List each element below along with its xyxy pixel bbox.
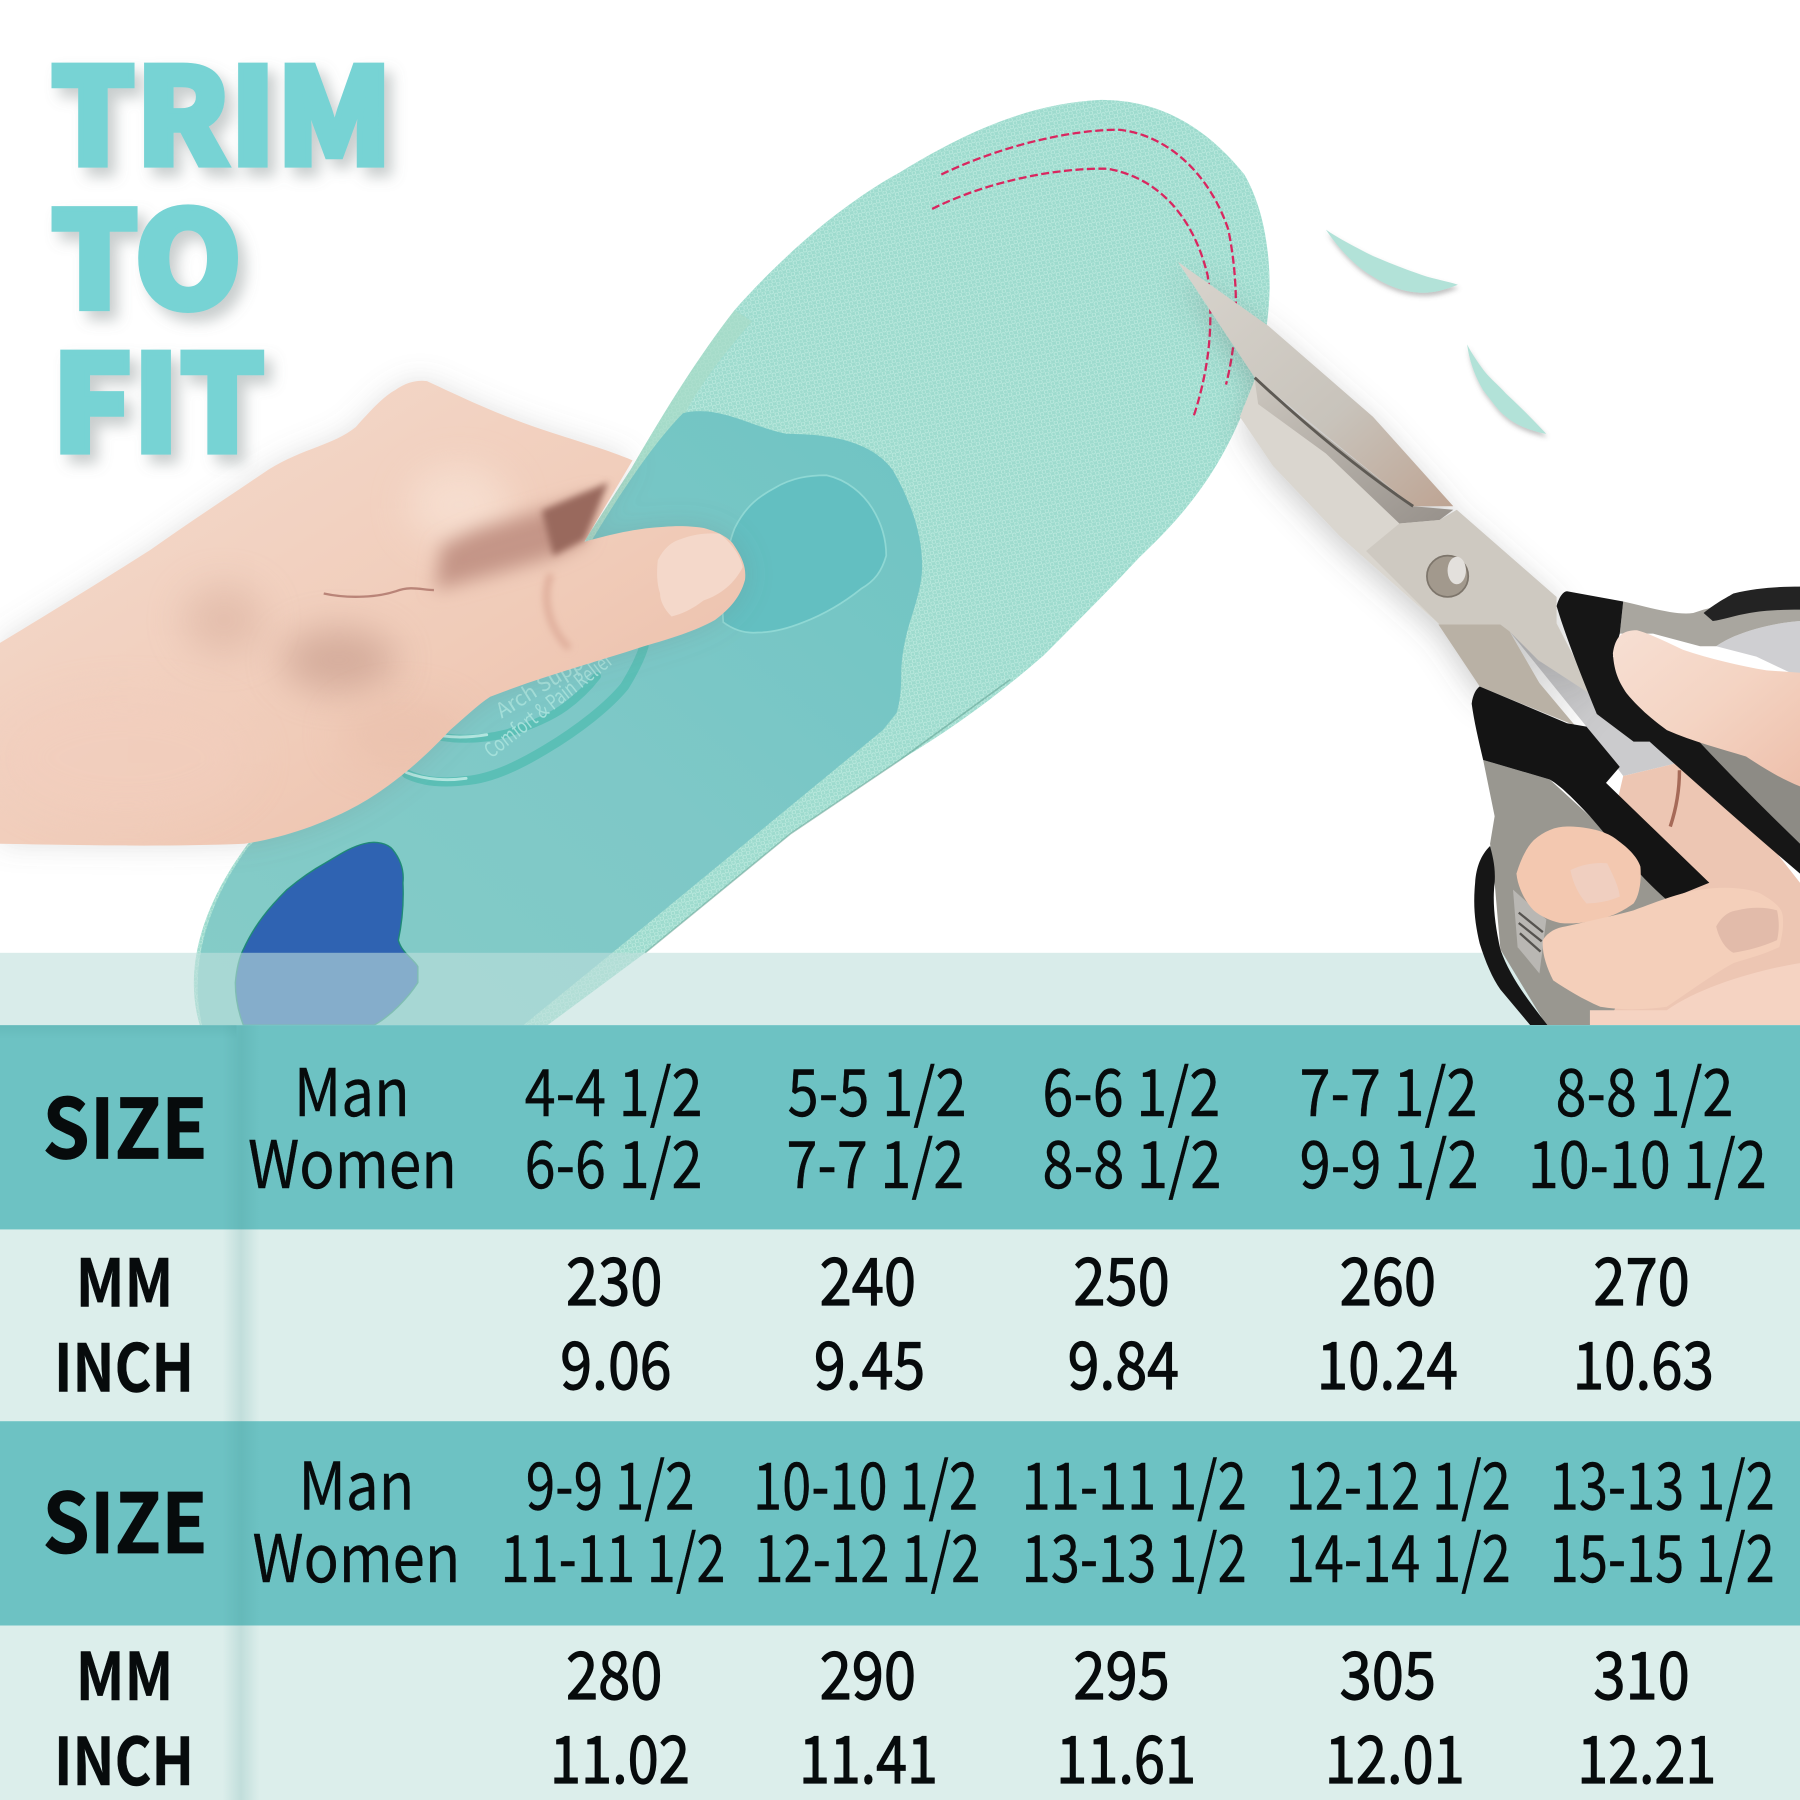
thumbnail	[657, 533, 743, 616]
row 1 size: 6-6 1/2	[1042, 1040, 1220, 1135]
trimmed scrap 2	[1467, 344, 1546, 434]
row 1 measurements: 270	[1593, 1229, 1690, 1324]
row backgrounds	[0, 1025, 1800, 1800]
title: trim to fit	[51, 12, 393, 491]
row 2 measurements: 11.61	[1056, 1707, 1196, 1800]
row 2 measurements: 11.02	[550, 1707, 690, 1800]
rim outer edge	[645, 680, 1010, 953]
trimmed scrap 1	[1326, 230, 1458, 293]
steel under thumb	[1513, 890, 1546, 973]
row 1 size: Women	[248, 1112, 457, 1207]
row 1 measurements: 10.24	[1317, 1313, 1458, 1408]
row 2 measurements: 310	[1593, 1623, 1690, 1718]
upper handle grey strip	[1700, 742, 1800, 844]
arch embossed rings	[406, 646, 644, 782]
title: trim to fit: TRIM	[51, 12, 393, 204]
row 1 size: 6-6 1/2	[525, 1112, 703, 1207]
palm crease	[1670, 770, 1679, 827]
row 2 measurements: 305	[1340, 1623, 1436, 1718]
lower blade bevel	[1255, 380, 1453, 523]
row 1 size: 7-7 1/2	[1299, 1040, 1477, 1135]
row 2 measurements: 12.01	[1325, 1707, 1465, 1800]
row 1 measurements: 240	[820, 1229, 916, 1324]
row 2 size: 11-11 1/2	[501, 1506, 726, 1601]
translucent band	[0, 953, 1800, 1025]
scissors and right hand	[1178, 262, 1800, 1025]
title: trim to fit: TO	[51, 155, 242, 347]
arch panel	[198, 411, 922, 1025]
lower blade	[1240, 380, 1440, 624]
row 1 measurements: 250	[1073, 1229, 1170, 1324]
row 1 measurements	[54, 1229, 1714, 1410]
row 1 measurements: 260	[1340, 1229, 1436, 1324]
dashed trim line outer	[941, 130, 1236, 385]
row 2 size	[42, 1434, 1775, 1601]
row 1 size: 4-4 1/2	[525, 1040, 703, 1135]
gap behind handles	[1510, 631, 1676, 776]
row 1 measurements: 9.84	[1068, 1313, 1179, 1408]
row 1 measurements: INCH	[54, 1315, 194, 1410]
row 1 size: 5-5 1/2	[788, 1040, 967, 1135]
row 2 measurements: 290	[820, 1623, 916, 1718]
row 1 size: 8-8 1/2	[1555, 1040, 1733, 1135]
row 2 measurements: MM	[76, 1624, 173, 1719]
row 2 measurements	[54, 1623, 1716, 1800]
blade edge	[1255, 378, 1413, 506]
embossed arch text: Arch Support	[489, 631, 613, 724]
row 2 measurements: 12.21	[1577, 1707, 1716, 1800]
upper blade	[1178, 262, 1453, 506]
gel pad	[723, 475, 886, 633]
upper handle grey	[1620, 587, 1800, 646]
lower tang	[1438, 624, 1575, 726]
insole body	[194, 100, 1270, 1025]
row 2 measurements: 11.41	[799, 1707, 938, 1800]
row 1 size: 9-9 1/2	[1299, 1112, 1479, 1207]
index finger	[1613, 630, 1800, 786]
insole	[194, 100, 1270, 1025]
scissor metal	[1178, 262, 1595, 726]
row 2 measurements: 295	[1073, 1623, 1170, 1718]
lower finger	[1590, 963, 1800, 1025]
row 2 size: 11-11 1/2	[1022, 1434, 1247, 1529]
row 2 size: 10-10 1/2	[753, 1434, 978, 1529]
row 2 size: Man	[298, 1434, 414, 1529]
row 1 measurements: 230	[566, 1229, 662, 1324]
row 2 size: 13-13 1/2	[1022, 1506, 1247, 1601]
row 1 measurements: 9.45	[814, 1313, 925, 1408]
top rim shading	[585, 310, 752, 540]
pivot screw	[1427, 556, 1468, 597]
row 1 size	[42, 1040, 1767, 1207]
hand shading	[184, 470, 612, 758]
forefoot texture	[194, 100, 1270, 1025]
row 2 size: 14-14 1/2	[1286, 1506, 1511, 1601]
thumb	[1516, 827, 1641, 923]
row 1 size: 8-8 1/2	[1042, 1112, 1221, 1207]
table: size chart	[0, 1025, 1800, 1800]
row 2 size: 12-12 1/2	[754, 1506, 980, 1601]
lower handle grey	[1483, 760, 1667, 1025]
row 2 size: SIZE	[42, 1457, 208, 1577]
upper handle black grip	[1557, 591, 1800, 874]
row 2 size: 12-12 1/2	[1286, 1434, 1511, 1529]
row 2 size: Women	[253, 1506, 460, 1601]
row 1 size: SIZE	[42, 1062, 208, 1182]
row 1 measurements: MM	[76, 1230, 173, 1325]
lower handle black loop	[1474, 846, 1547, 1025]
middle finger	[1543, 888, 1783, 1009]
hand silhouette	[0, 381, 745, 846]
left hand holding insole	[0, 381, 745, 846]
lower handle black grip	[1472, 686, 1709, 900]
row 2 measurements: 280	[566, 1623, 662, 1718]
row 1 measurements: 10.63	[1573, 1313, 1714, 1408]
row 1 size: Man	[294, 1040, 410, 1135]
dashed trim line inner	[932, 169, 1210, 416]
upper handle black cap	[1704, 587, 1800, 621]
upper handle loop interior	[1716, 621, 1800, 677]
blue heel pad	[235, 842, 418, 1025]
palm behind handles	[1614, 764, 1800, 1010]
left column shadow	[223, 1025, 259, 1800]
embossed arch text	[485, 658, 612, 756]
blade pivot body	[1366, 510, 1595, 697]
row 2 size: 9-9 1/2	[526, 1434, 695, 1529]
row 1 measurements: 9.06	[560, 1313, 672, 1408]
row 1 size: 7-7 1/2	[786, 1112, 964, 1207]
title: trim to fit: FIT	[52, 299, 265, 491]
embossed arch text: Comfort & Pain Relief	[477, 644, 618, 764]
